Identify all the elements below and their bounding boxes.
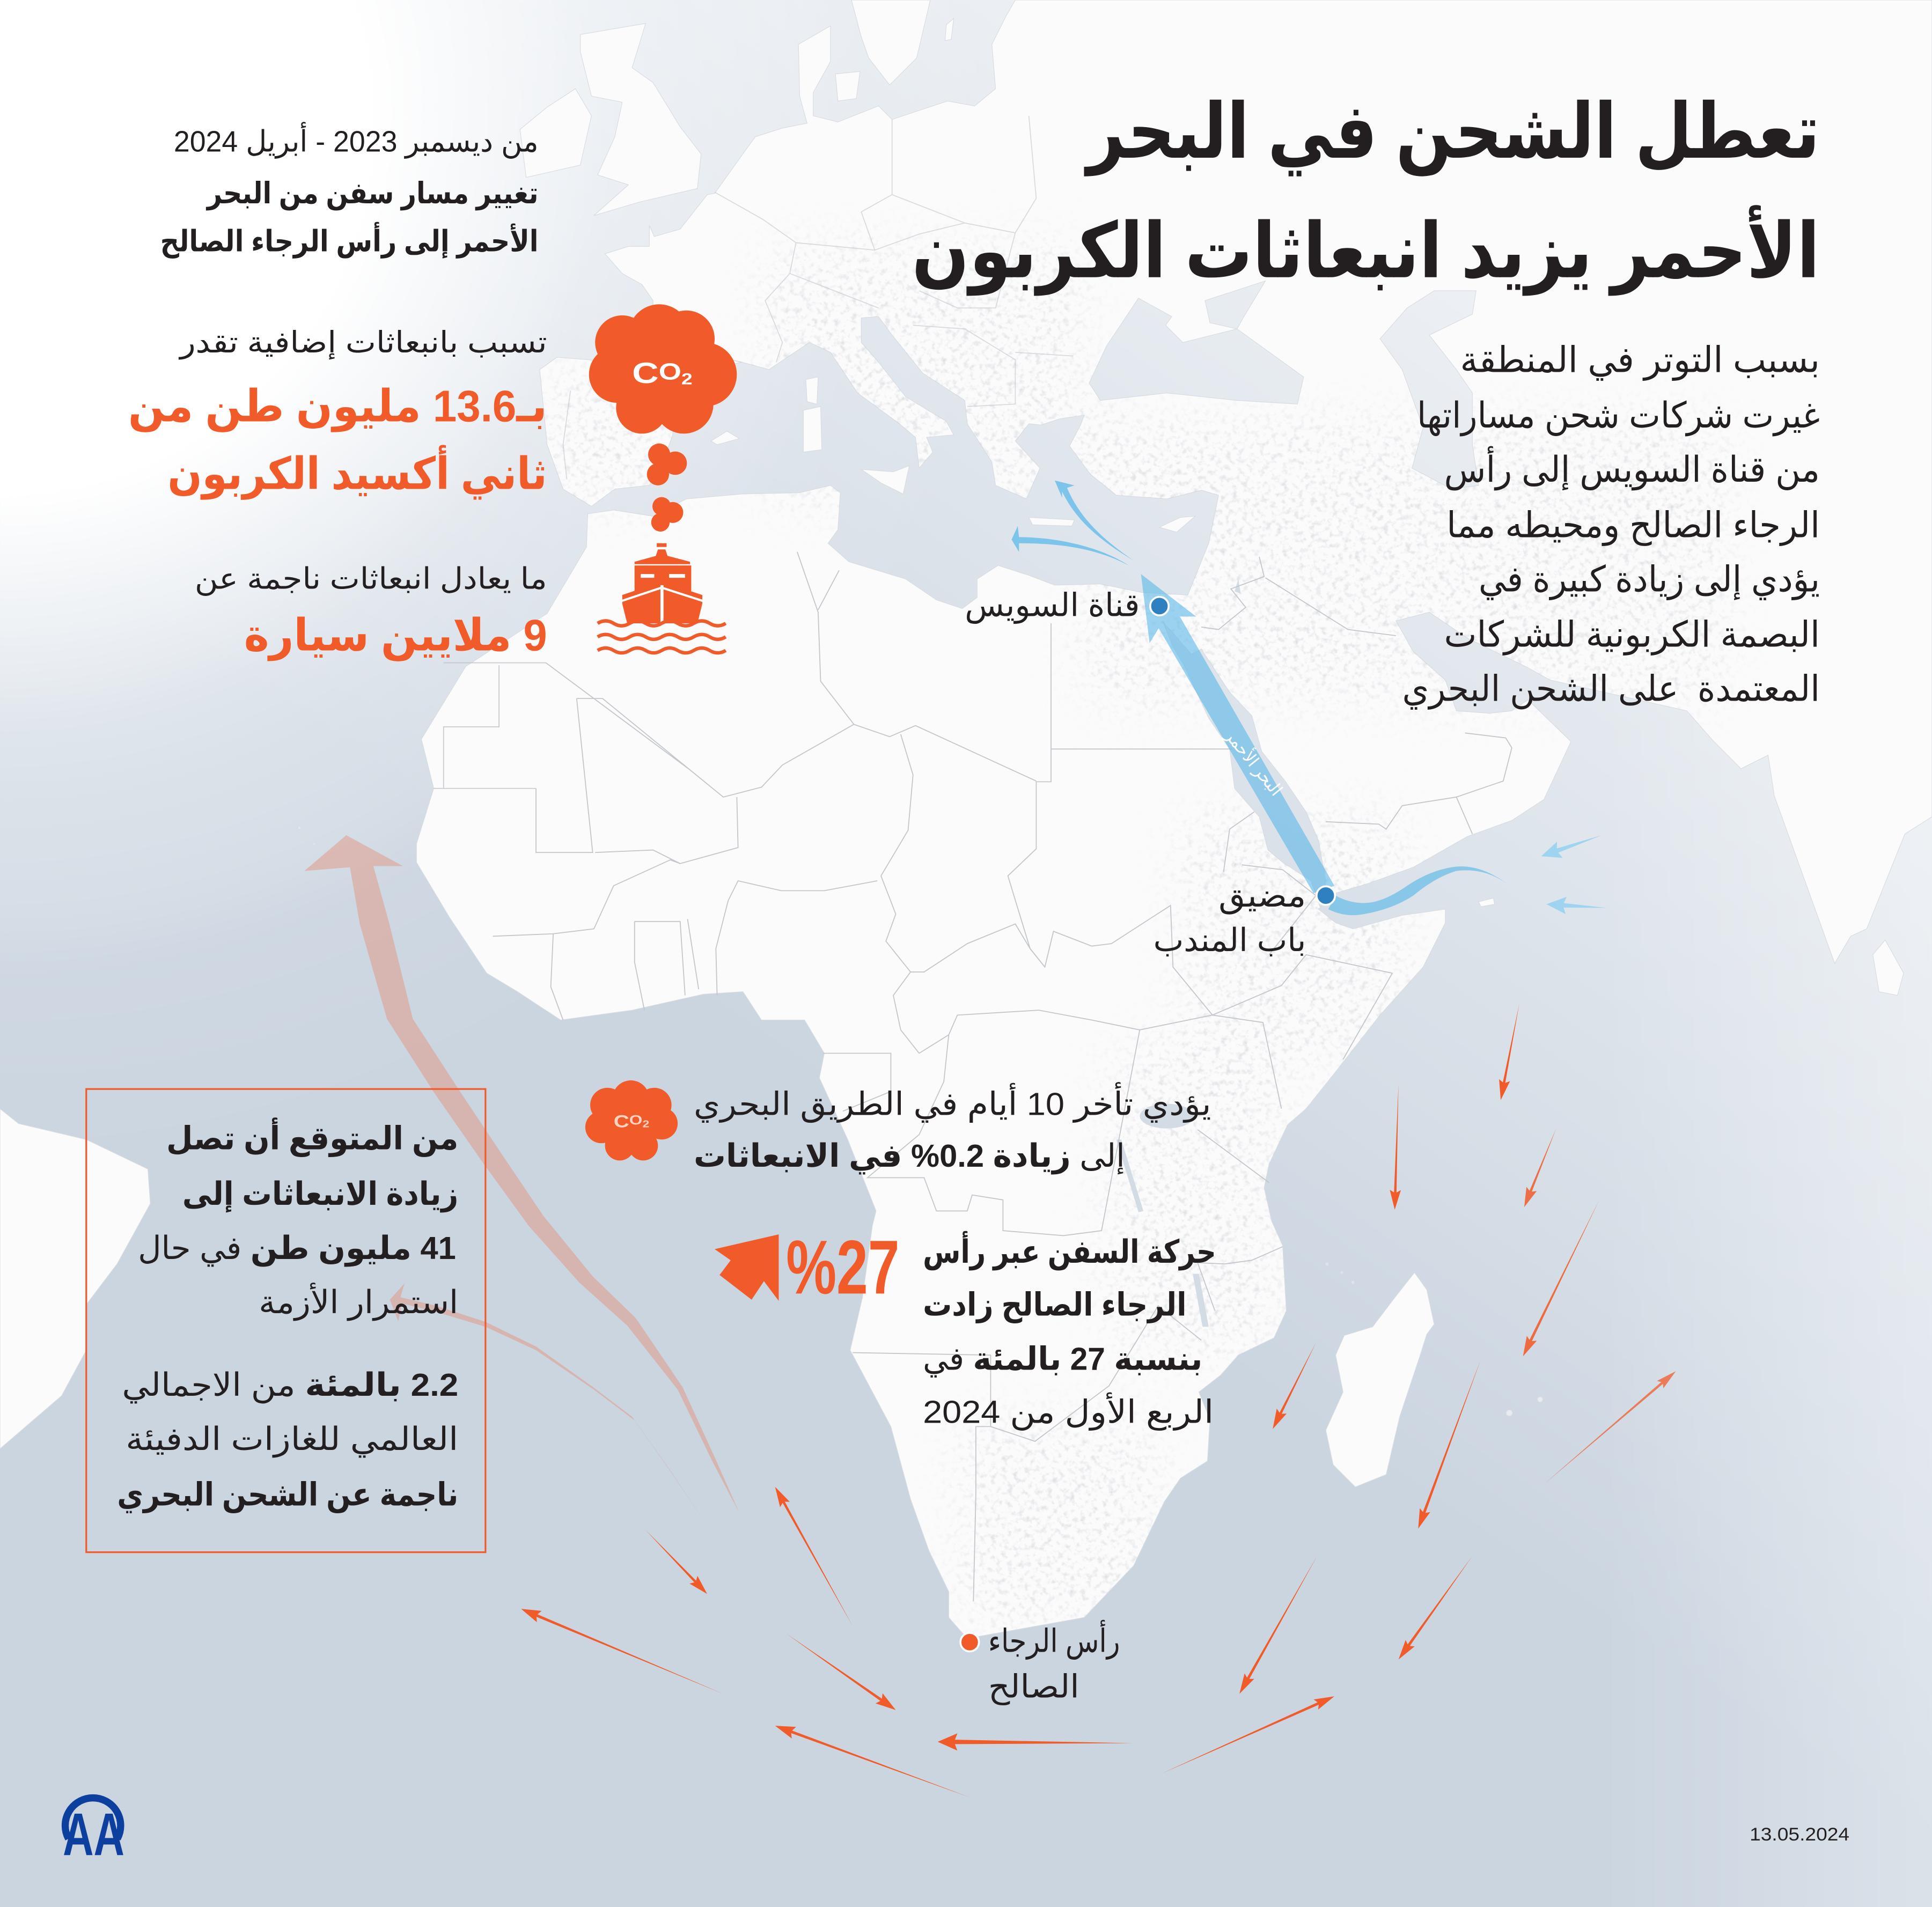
text block: route change: تغيير مسار سفن من البحر bbox=[205, 176, 539, 211]
marker: Bab el-Mandeb bbox=[1317, 886, 1335, 905]
large pale arrow along West Africa bbox=[304, 835, 739, 1513]
route arrow: Red Sea to Suez bbox=[1141, 574, 1334, 893]
label: Red Sea on route: البحر الأحمر bbox=[1221, 725, 1287, 800]
callout box bbox=[86, 1089, 486, 1552]
text block: route change: من ديسمبر 2023 - أبريل 2024 bbox=[174, 122, 539, 158]
text block: extra emissions: ما يعادل انبعاثات ناجمة عن bbox=[195, 562, 547, 596]
text: Cape route traffic bbox=[923, 1231, 1216, 1431]
intro paragraph: من قناة السويس إلى رأس bbox=[1444, 446, 1820, 491]
callout box: العالمي للغازات الدفيئة bbox=[126, 1421, 458, 1458]
icon: small CO2 cloud: C bbox=[614, 1111, 626, 1131]
intro paragraph: بسبب التوتر في المنطقة bbox=[1460, 341, 1820, 381]
text block: extra emissions: ثاني أكسيد الكربون bbox=[167, 445, 547, 500]
label: Bab el-Mandeb: مضيق bbox=[1218, 878, 1306, 915]
intro paragraph: غيرت شركات شحن مساراتها bbox=[1417, 396, 1820, 437]
text block: extra emissions bbox=[128, 326, 547, 662]
label: Cape of Good Hope bbox=[988, 1620, 1120, 1706]
text: ten day delay bbox=[694, 1082, 1211, 1175]
stat: 27 percent: %27 bbox=[786, 1225, 899, 1310]
title bbox=[912, 89, 1820, 296]
text: Cape route traffic: بنسبة 27 بالمئة في bbox=[923, 1341, 1202, 1378]
text: Cape route traffic: حركة السفن عبر رأس bbox=[923, 1231, 1216, 1271]
callout box: ناجمة عن الشحن البحري bbox=[117, 1476, 458, 1513]
map: lakes bbox=[1116, 579, 1241, 1327]
text block: extra emissions: بـ13.6 مليون طن من bbox=[128, 381, 547, 432]
icon: ship bbox=[598, 543, 726, 653]
title: تعطل الشحن في البحر bbox=[1084, 89, 1820, 176]
text: Cape route traffic: الرجاء الصالح زادت bbox=[923, 1287, 1187, 1324]
intro paragraph: المعتمدة على الشحن البحري bbox=[1402, 669, 1820, 710]
text: ten day delay: إلى زيادة 0.2% في الانبعاثات bbox=[694, 1138, 1125, 1175]
text: ten day delay: يؤدي تأخر 10 أيام في الطريق البحري bbox=[694, 1082, 1211, 1123]
map: terrain texture bbox=[542, 246, 1725, 1626]
text: Cape route traffic: الربع الأول من 2024 bbox=[923, 1392, 1214, 1431]
icon: CO2 cloud bbox=[589, 304, 737, 433]
text block: extra emissions: تسبب بانبعاثات إضافية تقدر bbox=[178, 326, 547, 360]
callout box: استمرار الأزمة bbox=[259, 1283, 458, 1321]
title: الأحمر يزيد انبعاثات الكربون bbox=[912, 205, 1820, 296]
icon: small CO2 cloud bbox=[585, 1080, 678, 1160]
logo: AA: AA bbox=[63, 1801, 124, 1868]
intro paragraph bbox=[1402, 341, 1820, 710]
icon: small CO2 cloud: O bbox=[629, 1113, 642, 1128]
text block: route change: الأحمر إلى رأس الرجاء الصالح bbox=[160, 222, 539, 259]
icon: orange arrow 27 percent bbox=[715, 1234, 778, 1301]
route arrows: Mediterranean split bbox=[1011, 481, 1134, 565]
label: Suez Canal: قناة السويس bbox=[965, 587, 1140, 624]
callout box: زيادة الانبعاثات إلى bbox=[182, 1176, 458, 1213]
orange ship traffic arrows around the Cape bbox=[519, 1003, 1679, 1803]
callout box: 2.2 بالمئة من الاجمالي bbox=[122, 1367, 458, 1404]
label: Bab el-Mandeb: باب المندب bbox=[1154, 922, 1306, 958]
thin pale arrow toward South Atlantic bbox=[390, 1284, 709, 1528]
icon: CO2 cloud: 2 bbox=[681, 371, 693, 388]
route arrow: Gulf of Aden bbox=[1328, 866, 1508, 915]
text block: extra emissions: 9 ملايين سيارة bbox=[244, 610, 547, 662]
date: 13.05.2024 bbox=[1750, 1824, 1849, 1845]
logo: AA bbox=[63, 1798, 124, 1868]
intro paragraph: البصمة الكربونية للشركات bbox=[1444, 615, 1820, 656]
map: country borders bbox=[434, 116, 1512, 1601]
label: Cape of Good Hope: رأس الرجاء bbox=[988, 1620, 1120, 1660]
text block: route change bbox=[160, 122, 539, 259]
icon: smoke puff upper bbox=[647, 444, 687, 485]
label: Bab el-Mandeb bbox=[1154, 878, 1306, 958]
icon: CO2 cloud: C bbox=[632, 356, 653, 389]
small blue arrows: Arabian Sea bbox=[1538, 827, 1607, 917]
intro paragraph: يؤدي إلى زيادة كبيرة في bbox=[1479, 559, 1820, 600]
icon: CO2 cloud: O bbox=[659, 359, 681, 385]
icon: small CO2 cloud: 2 bbox=[642, 1118, 649, 1129]
marker: Suez Canal bbox=[1150, 597, 1169, 615]
callout box: من المتوقع أن تصل bbox=[166, 1118, 458, 1158]
icon: smoke puff lower bbox=[651, 497, 683, 532]
callout box: 41 مليون طن في حال bbox=[138, 1230, 456, 1267]
marker: Cape of Good Hope bbox=[960, 1633, 979, 1651]
intro paragraph: الرجاء الصالح ومحيطه مما bbox=[1446, 505, 1820, 546]
label: Cape of Good Hope: الصالح bbox=[988, 1669, 1079, 1706]
